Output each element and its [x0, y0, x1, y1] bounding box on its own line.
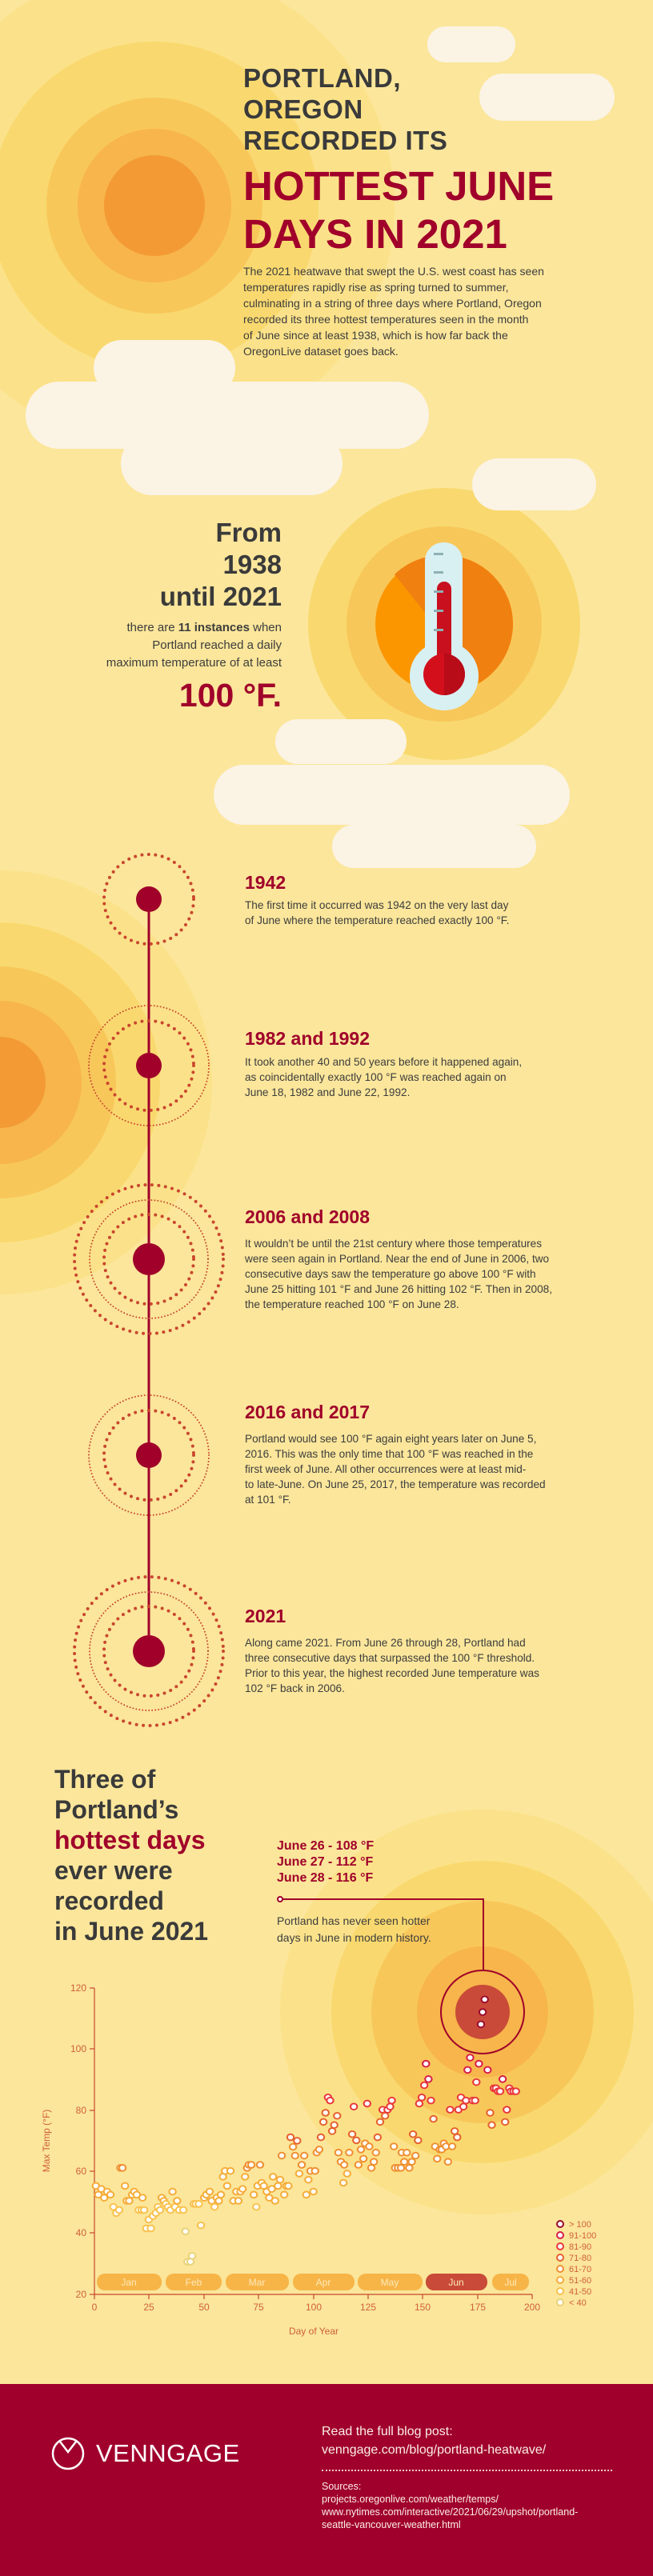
- legend: < 40: [569, 2298, 587, 2308]
- footer: [0, 2384, 653, 2576]
- intro paragraph: [243, 265, 544, 358]
- timeline entry: 2006 and 2008: were seen again in Portland. Near the end of June in 2006, two: [245, 1253, 549, 1265]
- timeline entry: 2021: three consecutive days that surpassed the 100 °F threshold.: [245, 1652, 535, 1664]
- legend: 91-100: [569, 2231, 596, 2241]
- heading: three hottest days: [54, 1765, 208, 1946]
- heading: three hottest days: ever were: [54, 1856, 173, 1885]
- axis labels: 50: [198, 2302, 210, 2313]
- intro paragraph: OregonLive dataset goes back.: [243, 345, 399, 358]
- timeline entry: 2021: Prior to this year, the highest recorded June temperature was: [245, 1667, 539, 1679]
- intro paragraph: The 2021 heatwave that swept the U.S. west coast has seen: [243, 265, 544, 278]
- stat block: from 1938 until 2021: 1938: [223, 550, 282, 579]
- callout note: days in June in modern history.: [277, 1931, 431, 1944]
- month pills: Jun: [448, 2277, 464, 2288]
- intro paragraph: of June since at least 1938, which is how far back the: [243, 329, 508, 342]
- timeline entry: 1942: 1942: [245, 872, 286, 893]
- heading: three hottest days: Three of: [54, 1765, 155, 1794]
- axis labels: Max Temp (°F): [41, 2110, 52, 2172]
- axis labels: [41, 1982, 540, 2337]
- logo: [51, 2437, 240, 2470]
- axis labels: 40: [76, 2227, 86, 2238]
- sun: timeline: [0, 870, 212, 1294]
- callout: dates: [277, 1839, 374, 1885]
- callout: dates: June 26 - 108 °F: [277, 1839, 374, 1853]
- month pills: Apr: [316, 2277, 331, 2288]
- timeline entry: 2016 and 2017: 2016. This was the only time that 100 °F was reached in the: [245, 1448, 533, 1460]
- blog link: [322, 2425, 546, 2457]
- legend: [557, 2220, 596, 2308]
- callout note: Portland has never seen hotter: [277, 1914, 430, 1927]
- clouds section 2: [214, 458, 596, 868]
- timeline entry: 1982 and 1992: [245, 1028, 522, 1098]
- timeline entry: 2016 and 2017: at 101 °F.: [245, 1494, 291, 1506]
- clouds: [26, 26, 615, 495]
- stat block: from 1938 until 2021: maximum temperature of at least: [106, 656, 282, 670]
- heading: three hottest days: recorded: [54, 1886, 164, 1915]
- timeline entry: 2006 and 2008: 2006 and 2008: [245, 1206, 370, 1227]
- month pills: Jan: [121, 2277, 137, 2288]
- axis labels: 175: [470, 2302, 486, 2313]
- stat block: from 1938 until 2021: [106, 518, 282, 714]
- axis labels: 200: [524, 2302, 540, 2313]
- month pills: Feb: [186, 2277, 202, 2288]
- title: [243, 63, 554, 257]
- data points: [93, 1996, 519, 2265]
- timeline entry: 2021: [245, 1606, 539, 1694]
- callout: dates: June 28 - 116 °F: [277, 1871, 373, 1885]
- stat block: from 1938 until 2021: Portland reached a daily: [152, 638, 282, 652]
- axis labels: 100: [70, 2043, 86, 2054]
- timeline entry: 2021: 102 °F back in 2006.: [245, 1682, 345, 1694]
- blog link: Read the full blog post:: [322, 2425, 453, 2438]
- intro paragraph: recorded its three hottest temperatures seen in the month: [243, 313, 528, 326]
- axis labels: 150: [415, 2302, 431, 2313]
- month pills: May: [381, 2277, 399, 2288]
- stat block: from 1938 until 2021: until 2021: [160, 582, 282, 611]
- title: PORTLAND,: [243, 63, 401, 93]
- timeline entry: 2006 and 2008: [245, 1206, 552, 1310]
- timeline entry: 1982 and 1992: It took another 40 and 50 years before it happened again,: [245, 1056, 522, 1068]
- axes: [90, 1988, 532, 2299]
- timeline entry: 1942: The first time it occurred was 1942 on the very last day: [245, 899, 508, 911]
- legend: 41-50: [569, 2287, 591, 2297]
- sources: [322, 2481, 578, 2530]
- axis labels: 120: [70, 1982, 86, 1994]
- title: HOTTEST JUNE: [243, 163, 554, 209]
- scatter chart: [41, 1896, 596, 2337]
- timeline entry: 2016 and 2017: Portland would see 100 °F again eight years later on June 5,: [245, 1433, 536, 1445]
- axis labels: 100: [306, 2302, 322, 2313]
- timeline entry: 2006 and 2008: consecutive days saw the temperature go above 100 °F with: [245, 1268, 536, 1280]
- title: RECORDED ITS: [243, 126, 447, 155]
- timeline entry: 1982 and 1992: 1982 and 1992: [245, 1028, 370, 1049]
- month pills: Mar: [249, 2277, 265, 2288]
- stat block: from 1938 until 2021: there are 11 instances when: [127, 621, 282, 634]
- timeline entry: 2016 and 2017: to late-June. On June 25, 2017, the temperature was recorded: [245, 1478, 546, 1490]
- axis labels: 80: [76, 2105, 86, 2116]
- timeline entry: 2006 and 2008: June 25 hitting 101 °F and June 26 hitting 102 °F. Then in 2008,: [245, 1283, 552, 1295]
- legend: 61-70: [569, 2265, 591, 2274]
- timeline entry: 1982 and 1992: as coincidentally exactly 100 °F was reached again on: [245, 1071, 507, 1083]
- sun: header: [0, 0, 395, 446]
- legend: > 100: [569, 2220, 591, 2230]
- title: OREGON: [243, 94, 363, 124]
- month pills: [97, 2274, 529, 2290]
- timeline entry: 1942: of June where the temperature reached exactly 100 °F.: [245, 914, 509, 926]
- intro paragraph: temperatures rapidly rise as spring turned to summer,: [243, 281, 508, 294]
- stat block: from 1938 until 2021: 100 °F.: [179, 677, 282, 714]
- sun: chart: [280, 1810, 653, 2214]
- axis labels: Day of Year: [289, 2326, 339, 2337]
- sources: www.nytimes.com/interactive/2021/06/29/upshot/portland-: [322, 2506, 578, 2518]
- axis labels: 20: [76, 2289, 86, 2300]
- timeline: [73, 853, 225, 1727]
- heading: three hottest days: in June 2021: [54, 1917, 208, 1946]
- blog link: venngage.com/blog/portland-heatwave/: [322, 2443, 546, 2457]
- axis labels: 25: [143, 2302, 154, 2313]
- callout note: [277, 1914, 431, 1944]
- timeline entry: 2021: 2021: [245, 1606, 286, 1626]
- timeline entry: 1942: [245, 872, 509, 926]
- sources: Sources:: [322, 2481, 361, 2492]
- intro paragraph: culminating in a string of three days where Portland, Oregon: [243, 297, 542, 310]
- stat block: from 1938 until 2021: From: [216, 518, 282, 547]
- axis labels: 0: [92, 2302, 98, 2313]
- legend: 51-60: [569, 2276, 591, 2286]
- legend: 81-90: [569, 2242, 591, 2252]
- callout connector: [278, 1897, 524, 2054]
- axis labels: 75: [253, 2302, 264, 2313]
- heading: three hottest days: Portland’s: [54, 1795, 178, 1824]
- timeline entry: 1982 and 1992: June 18, 1982 and June 22, 1992.: [245, 1086, 410, 1098]
- sources: projects.oregonlive.com/weather/temps/: [322, 2494, 499, 2505]
- axis labels: 125: [360, 2302, 376, 2313]
- sources: seattle-vancouver-weather.html: [322, 2519, 461, 2530]
- heading: three hottest days: hottest days: [54, 1826, 205, 1854]
- timeline entry: 2016 and 2017: 2016 and 2017: [245, 1402, 370, 1422]
- thermometer icon: [308, 488, 580, 760]
- title: DAYS IN 2021: [243, 211, 507, 257]
- timeline entry: 2006 and 2008: It wouldn’t be until the 21st century where those temperatures: [245, 1238, 542, 1250]
- timeline entry: 2016 and 2017: [245, 1402, 546, 1506]
- timeline entry: 2016 and 2017: first week of June. All other occurrences were at least mid-: [245, 1463, 526, 1475]
- timeline entry: 2006 and 2008: the temperature reached 100 °F on June 28.: [245, 1298, 459, 1310]
- timeline entry: 2021: Along came 2021. From June 26 through 28, Portland had: [245, 1637, 526, 1649]
- logo: VENNGAGE: [96, 2439, 240, 2467]
- callout: dates: June 27 - 112 °F: [277, 1855, 373, 1869]
- legend: 71-80: [569, 2254, 591, 2263]
- month pills: Jul: [504, 2277, 517, 2288]
- axis labels: 60: [76, 2166, 86, 2177]
